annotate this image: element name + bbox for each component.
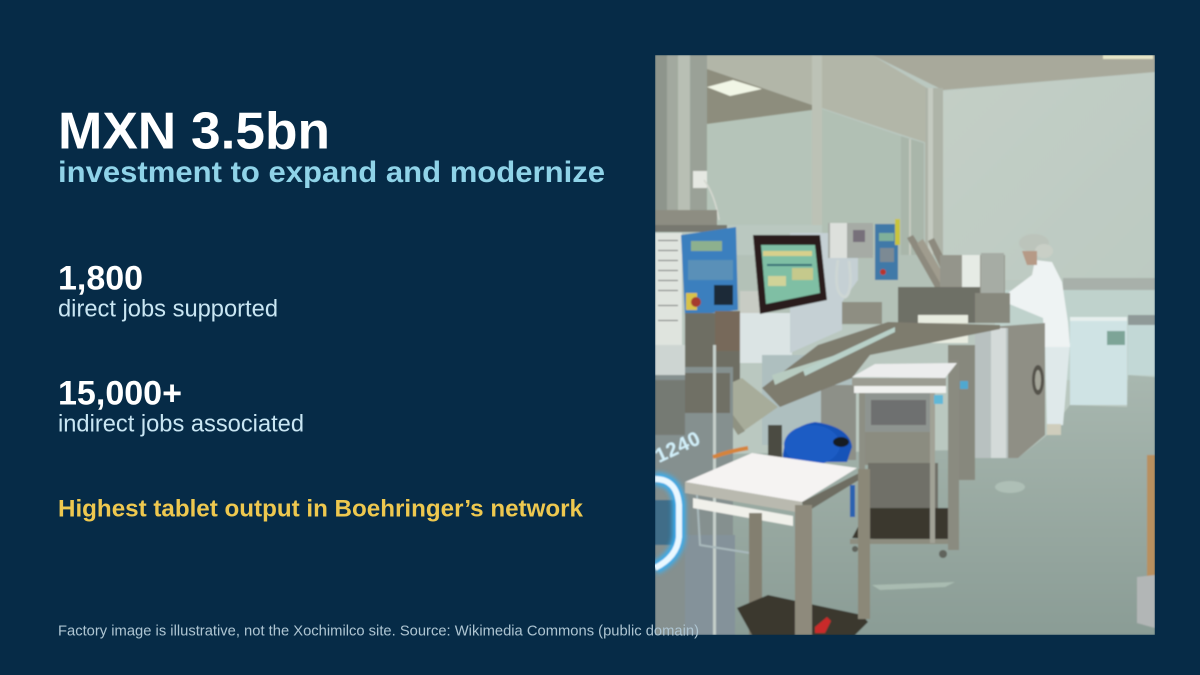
floor reflections [995, 481, 1025, 493]
floor [732, 375, 1155, 635]
left window [707, 69, 812, 225]
stat: direct jobs: direct jobs supported [58, 296, 278, 322]
white trays top [918, 315, 968, 343]
highlight callout: Highest tablet output in Boehringer’s network [58, 496, 584, 522]
headline figure: MXN 3.5bn [58, 102, 330, 160]
stat: indirect jobs [58, 374, 304, 438]
ceiling [872, 55, 1155, 90]
stat: indirect jobs: indirect jobs associated [58, 410, 304, 438]
subheading: investment to expand and modernize [58, 156, 605, 189]
touchscreen monitor [753, 235, 827, 314]
mid wall lower [738, 255, 935, 322]
right window [822, 109, 901, 255]
under conveyor background [762, 355, 852, 445]
conveyor [710, 322, 1000, 435]
center machine body [740, 291, 760, 315]
column [666, 55, 678, 210]
upper partition [706, 55, 926, 142]
back wall [944, 90, 972, 146]
upper control boxes [828, 219, 900, 297]
infographic slide [59, 55, 1155, 638]
stat: direct jobs [58, 260, 278, 322]
photo: factory production line [652, 55, 1155, 635]
source footnote: Factory image is illustrative, not the Xochimilco site. Source: Wikimedia Commons (public domain) [58, 624, 699, 640]
left acrylic machine [652, 345, 750, 635]
worker [1007, 234, 1070, 435]
foreground trolley [685, 453, 870, 635]
stat: indirect jobs: 15,000+ [58, 374, 182, 412]
motor block [842, 302, 882, 324]
control panel left [655, 210, 717, 225]
hopper chutes [898, 235, 1010, 323]
blue hose reel [768, 422, 855, 517]
freezer [1070, 317, 1127, 405]
wall rail [1063, 278, 1155, 290]
left acrylic machine: 1240 [652, 428, 704, 468]
back trolley [850, 360, 968, 558]
side floor box [1147, 455, 1155, 577]
orange hose [713, 448, 748, 457]
stat: direct jobs: 1,800 [58, 260, 143, 298]
main machine cabinet [975, 323, 1045, 458]
